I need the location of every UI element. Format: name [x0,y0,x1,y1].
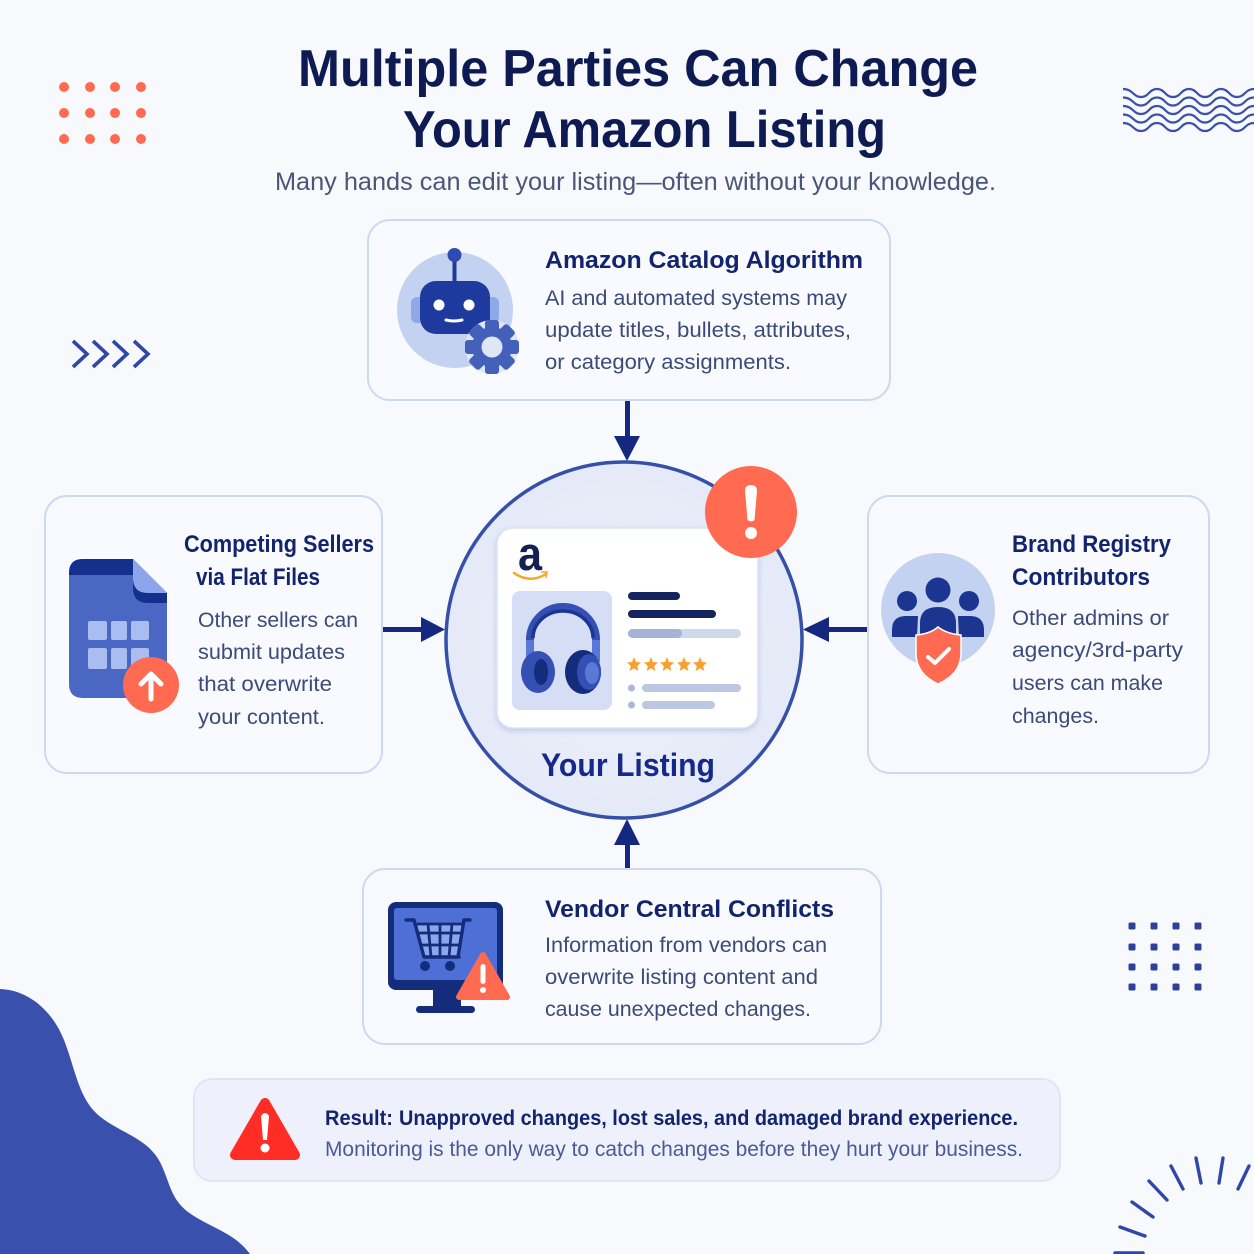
text: competing sellers description [198,609,358,729]
text: vendor central description: Information from vendors can [545,934,827,957]
icon: robot with gear [397,248,519,374]
text: vendor central description [545,934,827,1021]
decoration: radial rays [1115,1158,1249,1253]
panel: vendor central conflicts [363,869,881,1044]
bullet lines [628,684,741,709]
text: vendor central description: overwrite listing content and [545,966,818,989]
text: brand registry description: users can make [1012,672,1163,695]
decoration: navy dot grid [1128,922,1202,990]
icon: amazon logo: a [518,527,543,580]
heading: vendor central conflicts: Vendor Central Conflicts [545,896,834,923]
panel: amazon catalog algorithm [368,220,890,400]
text: catalog description: update titles, bullets, attributes, [545,319,851,342]
listing card [497,527,758,728]
arrow: right to center [803,617,867,642]
text: brand registry description: agency/3rd-party [1012,639,1184,662]
arrow: bottom to center [614,819,640,869]
text: result statement: Result: [325,1107,393,1130]
text: brand registry description [1012,607,1184,728]
heading: brand registry contributors: Contributors [1012,564,1150,591]
heading: brand registry contributors [1012,531,1172,591]
text: result statement: Unapproved changes, lost sales, and damaged brand experience. [399,1107,1018,1130]
product image: headphones [512,591,612,710]
heading: brand registry contributors: Brand Registry [1012,531,1172,558]
text: catalog description: AI and automated systems may [545,287,848,310]
icon: monitor with cart and warning [388,902,507,1013]
title: Your Amazon Listing [403,101,886,159]
heading: competing sellers: Competing Sellers [184,531,374,558]
decoration: bottom-left blob [0,989,250,1254]
text: competing sellers description: submit updates [198,641,345,664]
panel: result callout [194,1079,1060,1181]
icon: warning triangle [235,1103,295,1155]
text: catalog description [545,287,851,374]
decoration: wavy lines [1123,89,1254,131]
text: brand registry description: changes. [1012,705,1099,728]
heading: competing sellers: via Flat Files [196,564,320,591]
decoration: chevrons [73,341,148,367]
label: your listing: Your Listing [541,747,715,783]
text: brand registry description: Other admins or [1012,607,1169,630]
icon: alert badge [705,466,797,558]
star rating [627,657,707,671]
heading: amazon catalog algorithm: Amazon Catalog Algorithm [545,247,863,274]
center: your listing circle [446,462,802,818]
title [298,40,978,159]
text: competing sellers description: Other sellers can [198,609,358,632]
text: competing sellers description: that overwrite [198,673,332,696]
icon: team with shield [881,553,995,684]
decoration: coral dot grid [59,82,146,144]
arrow: left to center [383,617,445,642]
panel: competing sellers [45,496,382,773]
text: competing sellers description: your content. [198,706,325,729]
text: vendor central description: cause unexpected changes. [545,998,811,1021]
text: catalog description: or category assignments. [545,351,791,374]
subtitle: Many hands can edit your listing—often without your knowledge. [275,168,996,196]
heading: competing sellers [184,531,374,591]
title: Multiple Parties Can Change [298,40,978,98]
icon: flat file with upload [69,559,179,713]
text: monitoring advice: Monitoring is the only way to catch changes before they hurt your business. [325,1138,1023,1161]
panel: brand registry contributors [868,496,1209,773]
listing details lines [628,592,741,638]
arrow: top to center [614,400,640,461]
